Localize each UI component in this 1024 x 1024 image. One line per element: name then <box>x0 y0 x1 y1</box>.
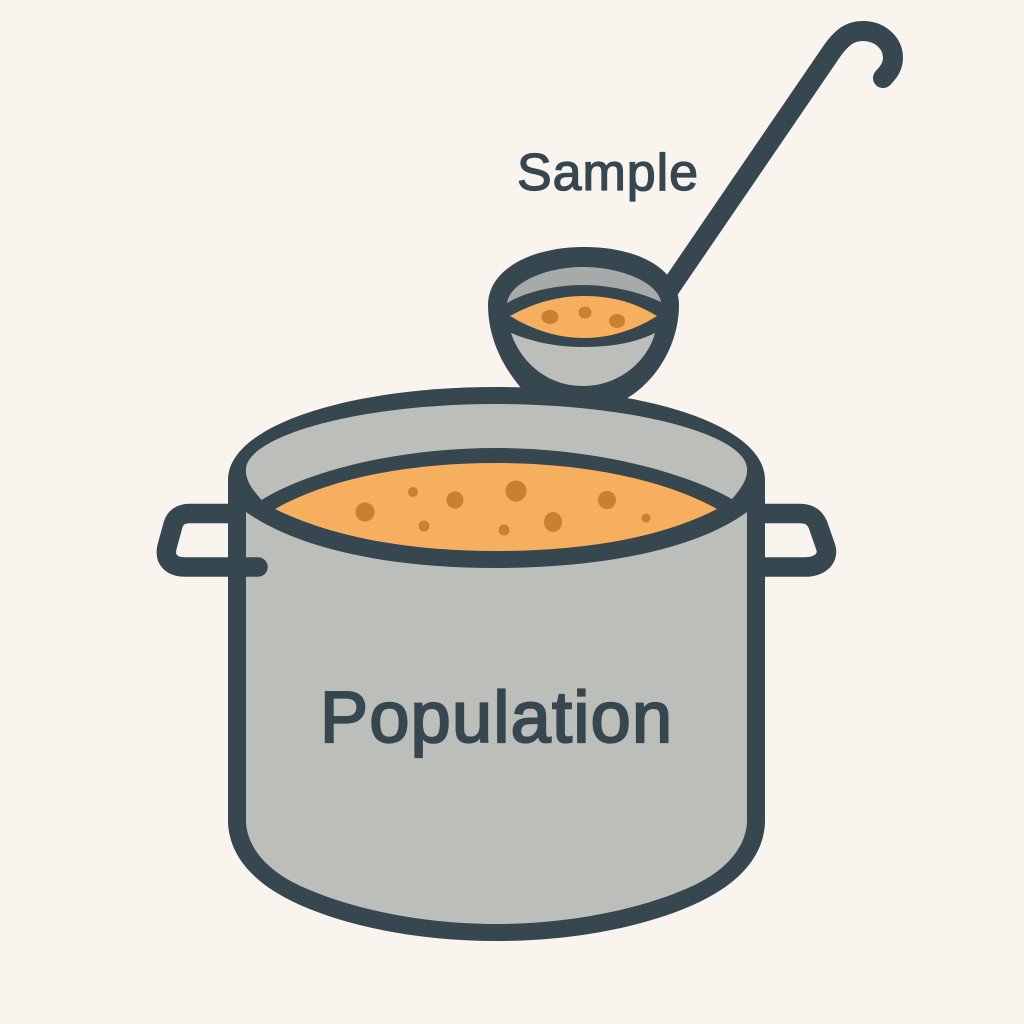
ladle bowl <box>488 247 679 402</box>
right handle <box>756 514 826 567</box>
left handle <box>166 514 237 567</box>
ladle soup <box>510 296 657 338</box>
pot interior wall <box>246 404 747 500</box>
ladle soup bubbles <box>542 306 625 328</box>
soup bubbles <box>356 480 650 536</box>
ladle lower interior <box>511 333 655 386</box>
icon: pot <box>166 387 826 941</box>
ladle upper interior <box>507 267 661 303</box>
sample label: Sample <box>517 144 698 202</box>
ladle handle <box>668 31 893 291</box>
soup surface <box>275 463 717 551</box>
handle stub <box>240 557 258 577</box>
population label: Population <box>320 678 672 758</box>
pot silhouette <box>228 387 765 941</box>
icon: ladle <box>488 31 893 402</box>
pot body front <box>246 512 747 924</box>
